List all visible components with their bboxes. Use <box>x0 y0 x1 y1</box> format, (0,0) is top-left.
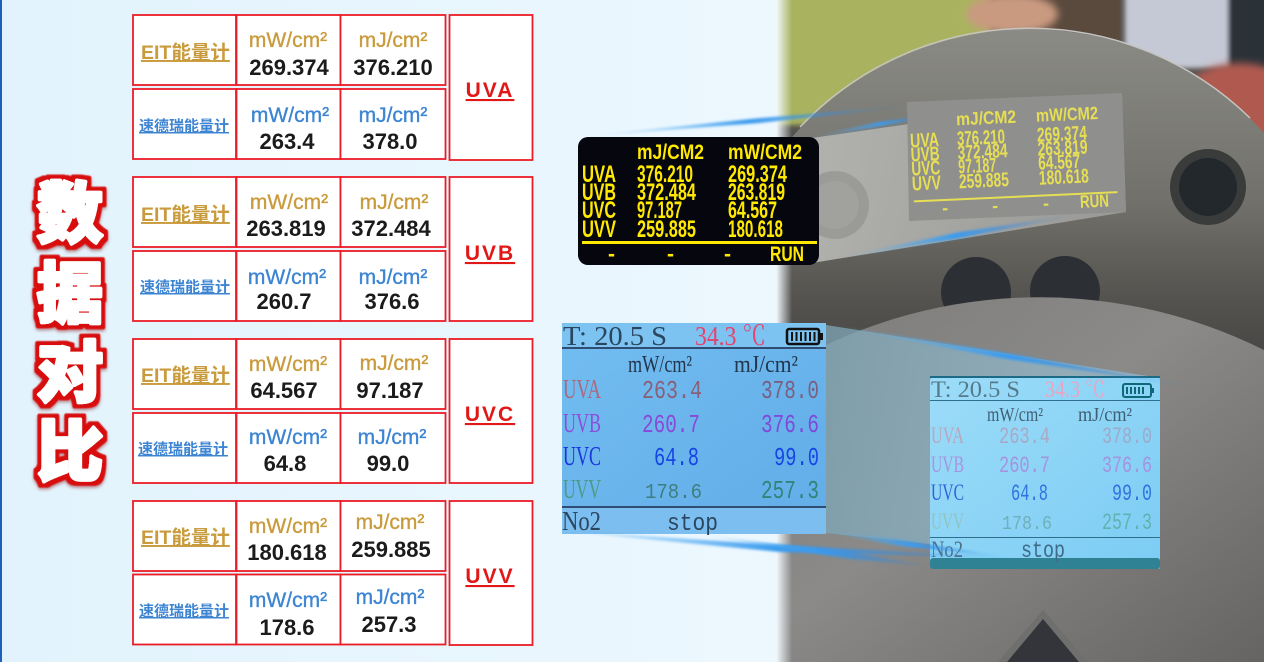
panel: UVA comparison: 263.4 <box>259 129 315 154</box>
panel: UVV comparison: 180.618 <box>247 540 327 565</box>
panel: UVV comparison: 259.885 <box>351 537 431 562</box>
panel: UVV comparison: UVV <box>465 565 515 588</box>
inset screen: EIT OLED: UVV <box>582 216 616 243</box>
panel: UVB comparison: mW/cm² <box>250 191 328 214</box>
inset screen: EIT OLED: - <box>608 243 615 266</box>
inset screen: EIT OLED: 263.819 <box>728 179 785 206</box>
inset screen: Sudori LCD: UVC <box>563 441 601 471</box>
callout streaks: LCD beam highlights <box>540 324 1195 566</box>
panel: UVC comparison: 64.8 <box>264 451 306 476</box>
panel: UVC comparison: mJ/cm² <box>360 352 428 375</box>
panel: UVA comparison: 376.210 <box>353 55 433 80</box>
title: 据 <box>37 257 103 331</box>
inset screen: EIT OLED: 372.484 <box>637 179 696 206</box>
panel: UVC comparison: mJ/cm² <box>358 426 426 449</box>
inset screen: Sudori LCD: UVB <box>563 408 601 438</box>
inset screen: EIT OLED: 269.374 <box>728 161 787 188</box>
panel: UVA comparison <box>133 15 532 160</box>
device screen: LCD on photo: 64.8 <box>1011 481 1048 507</box>
panel: UVC comparison: EIT能量计 <box>141 365 230 387</box>
device screen: LCD on photo: UVV <box>931 509 964 534</box>
inset screen: EIT OLED: RUN <box>770 243 804 266</box>
title: 对 <box>37 336 103 410</box>
device screen: EIT OLED on photo: UVB <box>910 143 940 166</box>
inset screen: EIT OLED <box>578 137 819 266</box>
panel: UVC comparison <box>133 339 532 483</box>
panel: UVA comparison: mJ/cm² <box>359 104 427 127</box>
panel: UVB comparison: mJ/cm² <box>360 191 428 214</box>
device screen: EIT OLED on photo: UVA <box>910 129 940 153</box>
icon: triangle button <box>998 610 1079 662</box>
inset screen: Sudori LCD: No2 <box>562 506 601 536</box>
device upper disc <box>790 29 1264 350</box>
panel: UVV comparison: mJ/cm² <box>356 511 424 534</box>
panel: UVA comparison: UVA <box>466 79 514 102</box>
device screen: LCD on photo: 263.4 <box>999 424 1050 450</box>
inset screen: Sudori LCD: 376.6 <box>761 410 819 440</box>
device screen: EIT OLED on photo: 376.210 <box>957 126 1005 150</box>
icon: lower twin buttons <box>941 256 1100 306</box>
panel: UVA comparison: mW/cm² <box>251 104 329 127</box>
inset screen: Sudori LCD <box>562 321 826 538</box>
panel: UVC comparison: UVC <box>465 403 515 426</box>
device screen: EIT OLED on photo <box>907 93 1126 221</box>
inset screen: EIT OLED: 97.187 <box>637 197 682 224</box>
device screen: EIT OLED on photo: - <box>942 198 949 218</box>
inset screen: EIT OLED: mW/CM2 <box>728 141 802 164</box>
panel: UVA comparison: mW/cm² <box>249 29 327 52</box>
panel: UVV comparison: mW/cm² <box>249 589 327 612</box>
device screen: EIT OLED on photo: UVV <box>912 172 942 195</box>
panel: UVC comparison: 64.567 <box>250 378 318 403</box>
device screen: LCD on photo: 178.6 <box>1002 513 1052 535</box>
inset screen: EIT OLED: - <box>667 243 674 266</box>
inset screen: Sudori LCD: 34.3 ℃ <box>695 321 766 351</box>
panel: UVC comparison: 速德瑞能量计 <box>138 440 228 458</box>
panel: UVA comparison: 269.374 <box>249 55 330 80</box>
panel: UVB comparison: mJ/cm² <box>359 266 427 289</box>
device rim highlight <box>800 28 1250 127</box>
inset screen: EIT OLED: UVA <box>582 161 616 188</box>
panel: UVA comparison: EIT能量计 <box>141 42 230 64</box>
panel: UVB comparison: 372.484 <box>351 216 432 241</box>
device screen: LCD on photo: T: 20.5 S <box>931 377 1020 402</box>
device screen: EIT OLED on photo: 259.885 <box>958 169 1009 193</box>
icon: right round button <box>1170 149 1246 225</box>
inset screen: EIT OLED: UVC <box>582 197 616 224</box>
device screen: LCD on photo: 260.7 <box>999 453 1050 479</box>
title <box>37 177 103 489</box>
panel: UVV comparison: 速德瑞能量计 <box>139 602 229 620</box>
icon: battery large <box>787 329 823 344</box>
panel: UVB comparison <box>133 177 532 321</box>
device screen: LCD on photo: stop <box>1021 538 1065 564</box>
inset screen: EIT OLED: 259.885 <box>637 216 696 243</box>
device screen: EIT OLED on photo: 263.819 <box>1037 136 1088 161</box>
device screen: LCD on photo: 99.0 <box>1112 481 1152 507</box>
panel: UVB comparison: mW/cm² <box>248 266 326 289</box>
panel: UVB comparison: 260.7 <box>256 289 312 314</box>
device screen: EIT OLED on photo: 372.484 <box>957 140 1009 164</box>
device screen: LCD on photo: 376.6 <box>1102 453 1152 479</box>
panel: UVA comparison: 速德瑞能量计 <box>139 117 229 135</box>
device screen: EIT OLED on photo: UVC <box>911 157 941 180</box>
device screen: LCD on photo: 257.3 <box>1102 510 1152 536</box>
device screen: LCD on photo: mW/cm² <box>987 404 1043 426</box>
inset screen: Sudori LCD: stop <box>667 511 718 538</box>
device screen: EIT OLED on photo: - <box>992 196 999 216</box>
inset screen: Sudori LCD: UVV <box>563 474 601 504</box>
panel: UVV comparison: 178.6 <box>259 615 315 640</box>
inset screen: EIT OLED: 180.618 <box>728 216 783 243</box>
callout beam: LCD zoom <box>826 325 1160 569</box>
inset screen: EIT OLED: mJ/CM2 <box>637 141 704 164</box>
device screen: EIT OLED on photo: 180.618 <box>1038 165 1089 190</box>
panel: UVB comparison: 376.6 <box>364 289 420 314</box>
device screen: LCD on photo: 378.0 <box>1102 424 1152 450</box>
device screen: EIT OLED on photo: 64.567 <box>1038 151 1081 175</box>
panel: UVC comparison: 99.0 <box>367 451 409 476</box>
title: 数 <box>37 177 103 251</box>
panel: UVV comparison: EIT能量计 <box>141 527 230 549</box>
inset screen: Sudori LCD: 263.4 <box>642 376 702 406</box>
device screen: EIT OLED on photo: mJ/CM2 <box>956 107 1016 129</box>
panel: UVV comparison: mW/cm² <box>249 515 327 538</box>
inset screen: EIT OLED: - <box>724 243 731 266</box>
device screen: LCD on photo: No2 <box>931 537 963 562</box>
panel: UVA comparison: 378.0 <box>362 129 418 154</box>
inset screen: Sudori LCD: 257.3 <box>761 476 819 506</box>
device screen: LCD on photo: 34.3 ℃ <box>1045 377 1105 402</box>
panel: UVC comparison: mW/cm² <box>249 353 327 376</box>
panel: UVV comparison: mJ/cm² <box>356 586 424 609</box>
device screen: EIT OLED on photo: 97.187 <box>958 155 997 178</box>
inset screen: Sudori LCD: 378.0 <box>761 376 819 406</box>
inset screen: EIT OLED: 64.567 <box>728 197 777 224</box>
icon: battery small <box>1123 384 1154 397</box>
inset screen: EIT OLED: 376.210 <box>637 161 693 188</box>
photo: device held in hand <box>770 0 1264 662</box>
callout beam: OLED zoom <box>586 93 1126 263</box>
panel: UVV comparison <box>133 501 532 645</box>
inset screen: Sudori LCD: 260.7 <box>642 410 700 440</box>
panel: UVB comparison: EIT能量计 <box>141 204 230 226</box>
device lower disc <box>776 297 1264 662</box>
device screen: EIT OLED on photo: RUN <box>1080 191 1109 212</box>
device screen: EIT OLED on photo: mW/CM2 <box>1036 103 1098 126</box>
device screen: EIT OLED on photo: 269.374 <box>1036 122 1088 147</box>
device screen: EIT OLED on photo: - <box>1043 193 1049 214</box>
device screen: LCD on photo: UVB <box>931 452 964 477</box>
panel: UVC comparison: 97.187 <box>356 378 424 403</box>
panel: UVB comparison: UVB <box>465 242 515 265</box>
panel: UVA comparison: mJ/cm² <box>359 29 427 52</box>
device screen: LCD on photo: UVA <box>931 423 964 448</box>
inset screen: Sudori LCD: 64.8 <box>654 443 699 473</box>
inset screen: Sudori LCD: 178.6 <box>645 482 702 505</box>
device screen: LCD on photo: UVC <box>931 480 964 505</box>
inset screen: Sudori LCD: T: 20.5 S <box>563 321 667 351</box>
inset screen: Sudori LCD: 99.0 <box>774 443 819 473</box>
device screen: LCD on photo <box>930 376 1160 569</box>
panel: UVB comparison: 263.819 <box>246 216 326 241</box>
title: 比 <box>37 415 103 489</box>
inset screen: Sudori LCD: UVA <box>563 374 601 404</box>
panel: UVV comparison: 257.3 <box>361 612 417 637</box>
inset screen: EIT OLED: UVB <box>582 179 616 206</box>
inset screen: Sudori LCD: mJ/cm² <box>734 352 798 378</box>
inset screen: Sudori LCD: mW/cm² <box>628 352 692 378</box>
device screen: LCD on photo: mJ/cm² <box>1078 404 1132 426</box>
panel: UVC comparison: mW/cm² <box>249 426 327 449</box>
panel: UVB comparison: 速德瑞能量计 <box>140 278 230 296</box>
